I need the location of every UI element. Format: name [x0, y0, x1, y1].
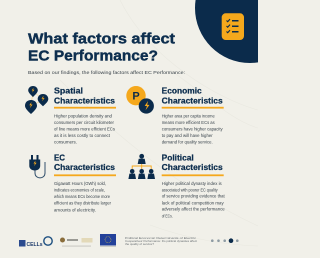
heading: Spatial	[54, 87, 83, 96]
icon: hierarchy of people	[128, 154, 155, 179]
body text	[54, 181, 111, 212]
body text	[54, 113, 116, 145]
heading: EC	[54, 154, 65, 163]
body text: Higher political dynasty index is	[162, 181, 222, 186]
body text: which means ECs become more	[54, 194, 110, 199]
title: What factors affect	[28, 30, 175, 47]
body text	[162, 181, 225, 218]
footer project text: Cooperatives' Performance: Do political dynasties affect	[125, 239, 197, 243]
body text: amounts of electricity.	[54, 207, 96, 212]
footer logos	[19, 234, 197, 248]
panel: spatial characteristics	[25, 86, 116, 145]
heading: Characteristics	[162, 163, 223, 172]
body text: demand for quality service.	[162, 140, 213, 145]
icon: checklist	[222, 13, 244, 40]
title: EC Performance?	[28, 47, 158, 64]
body text	[162, 113, 223, 145]
heading	[162, 87, 223, 106]
panel: economic characteristics	[126, 86, 224, 145]
logo: EU flag	[100, 234, 116, 247]
heading: Political	[162, 154, 194, 163]
body text: to pay and will have higher	[162, 133, 213, 138]
body text: as it is less costly to connect	[54, 133, 111, 138]
body text: adversely affect the performance	[162, 207, 225, 212]
heading: Characteristics	[162, 97, 223, 106]
logo: CELLs	[19, 237, 52, 248]
heading	[162, 154, 223, 172]
body text: Higher area per capita income	[162, 113, 215, 118]
dark corner circle	[195, 0, 305, 63]
body text: of line means more efficient ECs	[54, 126, 116, 132]
icon: plug	[29, 155, 45, 178]
footer project text: Political Economic Determinants of Electric	[125, 236, 197, 240]
body text: indicates economies of scale,	[54, 188, 105, 192]
body text: associated with poorer EC quality	[162, 187, 218, 192]
logo: university	[60, 238, 92, 246]
heading: Characteristics	[54, 163, 115, 172]
title	[28, 30, 175, 64]
pagination dots	[211, 238, 239, 243]
body text: Higher population density and	[54, 113, 112, 118]
icon: map pins	[25, 86, 48, 114]
heading	[54, 87, 115, 106]
subtitle: Based on our findings, the following factors affect EC Performance:	[28, 70, 185, 76]
body text: consumers have higher capacity	[162, 126, 223, 132]
body text: consumers per circuit kilometer	[54, 120, 114, 125]
body text: of ECs.	[162, 213, 173, 218]
heading: Economic	[162, 87, 202, 96]
body text: Gigawatt Hours (GWh) sold,	[54, 181, 106, 186]
panel: political characteristics	[128, 154, 225, 218]
body text: efficient as they distribute larger	[54, 201, 111, 206]
body text: of service providing evidence that	[162, 194, 225, 199]
footer project text	[125, 236, 197, 246]
footer project text: the quality of service?	[125, 242, 154, 246]
logo: CELLs: CELLs	[26, 242, 42, 248]
body text: means more efficient ECs as	[162, 120, 215, 125]
body text: consumers.	[54, 140, 77, 145]
heading: Characteristics	[54, 97, 115, 106]
body text: lack of political competition may	[162, 200, 224, 205]
panel: EC characteristics	[29, 154, 116, 212]
icon: coin and bolt: P	[132, 91, 140, 103]
heading	[54, 154, 115, 172]
